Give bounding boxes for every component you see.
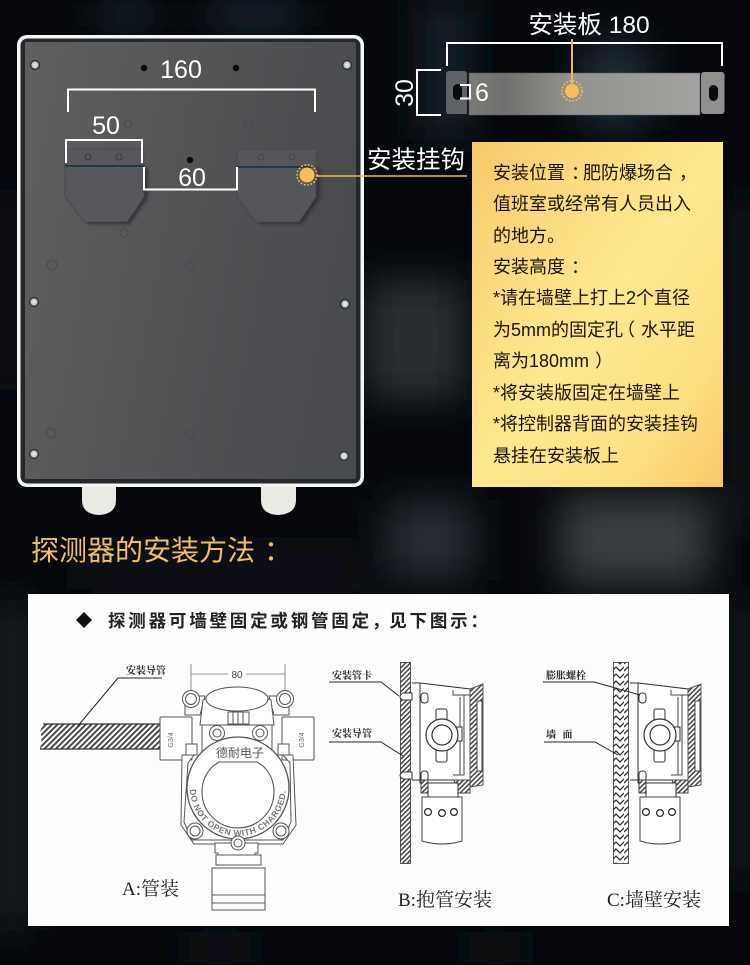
device body bbox=[160, 687, 314, 910]
label: conduit bbox=[329, 727, 403, 756]
text block: installation notes: *将安装版固定在墙壁上 bbox=[493, 383, 680, 403]
bracket: 180 dimension bbox=[447, 11, 722, 66]
bracket: 6 dimension bbox=[460, 79, 489, 107]
heading: detector installation: 探测器的安装方法 ： bbox=[31, 535, 292, 566]
caption A: A:管装 bbox=[122, 878, 179, 900]
bracket: 180 dimension: 安装板 180 bbox=[528, 11, 650, 39]
icon: left hook bbox=[65, 149, 148, 224]
text block: installation notes: *将控制器背面的安装挂钩 bbox=[493, 414, 698, 434]
icon: right slot bbox=[709, 85, 718, 101]
diagrams heading: 探测器可墙壁固定或钢管固定，见下图示： bbox=[108, 611, 491, 631]
device text: G3/4 bbox=[299, 732, 306, 748]
dimension: 80: 80 bbox=[231, 670, 243, 681]
panel: mounting plate photo bbox=[391, 11, 724, 115]
icon: right hook bbox=[237, 149, 320, 224]
text block: installation notes: 的地方。 bbox=[493, 226, 565, 246]
bracket: 30 dimension: 30 bbox=[391, 79, 419, 107]
diagram B: clamp mount bbox=[329, 662, 492, 911]
label: expansion bolt: 膨胀螺栓 bbox=[546, 669, 586, 682]
wall hatch bbox=[614, 662, 628, 864]
text block: installation notes: 离为180mm ） bbox=[493, 351, 613, 371]
callout: plate marker bbox=[562, 39, 582, 101]
dimension: 80 bbox=[191, 664, 285, 692]
label: conduit: 安装导管 bbox=[126, 664, 166, 677]
bracket: 50 dimension bbox=[66, 112, 142, 163]
panel: controller back photo bbox=[17, 35, 364, 515]
text block: installation notes: 值班室或经常有人员出入 bbox=[493, 194, 691, 214]
icon: mounting holes bbox=[141, 65, 239, 163]
label: conduit bbox=[77, 664, 166, 727]
device text: 德耐电子 bbox=[216, 745, 264, 760]
text block: installation notes: 悬挂在安装板上 bbox=[493, 446, 619, 466]
panel: installation diagrams bbox=[28, 594, 729, 926]
text block: installation notes: 安装位置 ：肥防爆场合 ， bbox=[493, 163, 697, 183]
faint moulded bosses bbox=[46, 120, 332, 440]
icon: left cable gland bbox=[82, 485, 116, 515]
text block: installation notes: 为5mm的固定孔（ 水平距 bbox=[493, 320, 695, 340]
plate right tab bbox=[701, 72, 724, 114]
wall hatch bbox=[400, 662, 410, 864]
device side view bbox=[630, 683, 701, 844]
clamps bbox=[400, 693, 412, 779]
caption C: C:墙壁安装 bbox=[607, 889, 701, 911]
callout: mounting hook: 安装挂钩 bbox=[367, 146, 465, 174]
device side view bbox=[412, 683, 483, 844]
device text: DO NOT OPEN WITH CHARGED. bbox=[190, 790, 286, 836]
caption B: B:抱管安装 bbox=[398, 889, 492, 911]
icon: left slot bbox=[453, 84, 462, 100]
device text: G3/4 bbox=[168, 732, 175, 748]
bracket: 6 dimension: 6 bbox=[475, 79, 489, 107]
label: clamp: 安装管卡 bbox=[332, 669, 372, 682]
label: conduit: 安装导管 bbox=[332, 727, 372, 740]
label: expansion bolt bbox=[543, 669, 640, 695]
icon: diamond bullet bbox=[76, 612, 92, 628]
callout: mounting hook bbox=[297, 146, 467, 185]
panel frame bbox=[17, 35, 364, 487]
bracket: 60 dimension: 60 bbox=[178, 164, 206, 192]
icon: right cable gland bbox=[261, 485, 296, 515]
bracket: 160 dimension bbox=[68, 56, 315, 112]
text block: installation notes: *请在墙壁上打上2个直径 bbox=[493, 288, 690, 308]
bracket: 60 dimension bbox=[144, 164, 237, 192]
device text bbox=[168, 732, 306, 836]
plate left tab bbox=[446, 71, 467, 114]
label: clamp bbox=[329, 669, 399, 696]
bracket: 160 dimension: 160 bbox=[160, 56, 202, 84]
diagram C: wall mount bbox=[543, 662, 701, 911]
label: wall bbox=[544, 728, 618, 755]
bracket: 50 dimension: 50 bbox=[92, 112, 120, 140]
text block: installation notes: 安装高度 ： bbox=[493, 257, 589, 277]
label: wall: 墙 面 bbox=[546, 728, 572, 741]
pipe bbox=[40, 724, 161, 749]
text block: installation notes bbox=[493, 163, 698, 466]
icon: screws bbox=[29, 60, 352, 461]
panel face bbox=[20, 38, 360, 484]
diagram A: pipe mount bbox=[40, 664, 314, 910]
panel: installation notes bbox=[472, 142, 723, 487]
bracket: 30 dimension bbox=[391, 70, 441, 115]
plate center bbox=[469, 73, 700, 115]
